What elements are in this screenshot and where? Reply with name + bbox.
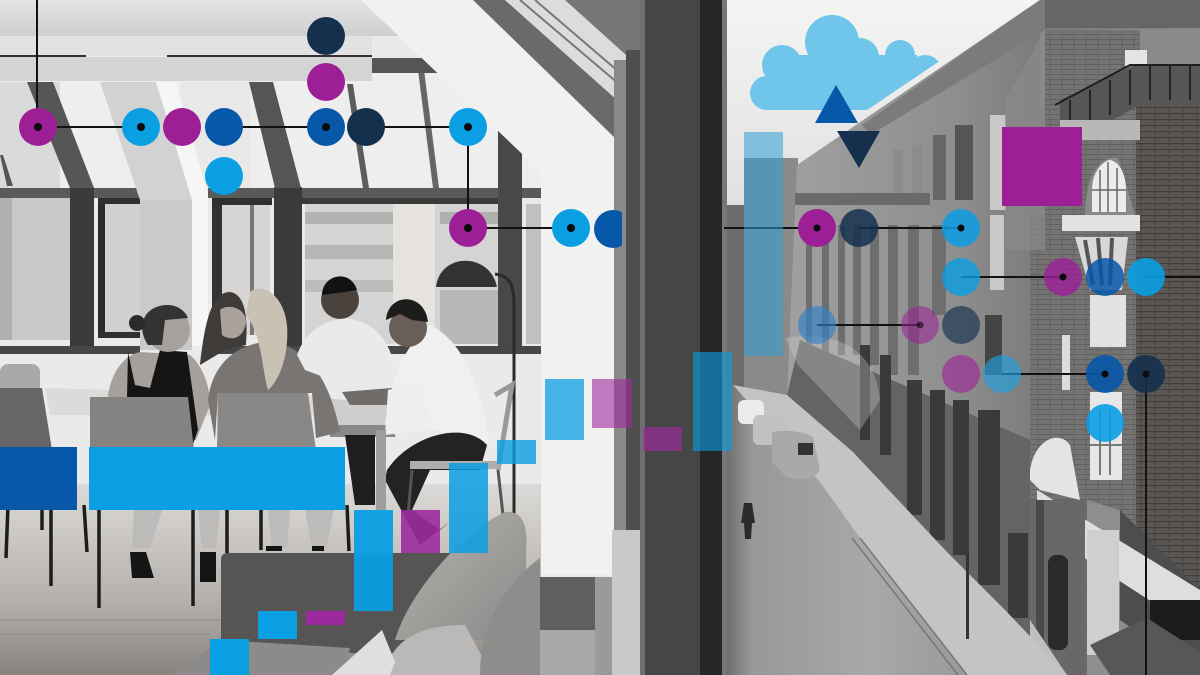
pedestrian xyxy=(741,503,755,539)
dark band xyxy=(795,193,930,205)
long facade xyxy=(787,0,1067,675)
photo: office interior xyxy=(0,0,640,675)
far chair xyxy=(0,364,40,394)
door pilasters xyxy=(1030,500,1085,675)
photo: street view xyxy=(722,0,1200,675)
legs of people xyxy=(132,510,334,548)
arched window xyxy=(1085,158,1135,215)
sloped wall xyxy=(361,0,614,575)
lamp xyxy=(436,261,497,287)
person 4 xyxy=(297,318,398,385)
chair legs xyxy=(6,505,349,608)
skylight side frames xyxy=(473,0,626,140)
overlay: dots right xyxy=(798,209,1165,442)
icon: cloud xyxy=(750,15,942,110)
roof balcony xyxy=(1055,50,1200,140)
lamp post xyxy=(966,555,969,639)
table xyxy=(45,388,330,416)
brick tower xyxy=(1136,105,1200,675)
windows xyxy=(806,125,973,375)
icon: triangle up xyxy=(815,85,858,123)
overlay: dots left xyxy=(19,17,632,248)
rafters xyxy=(27,82,94,188)
sofa xyxy=(221,553,461,653)
icon: triangle down xyxy=(837,131,880,168)
awning xyxy=(1090,618,1200,675)
window frames xyxy=(0,188,140,198)
ceiling xyxy=(0,0,400,36)
overlay: coloured bars xyxy=(0,352,732,675)
distant buildings xyxy=(744,158,798,398)
glass reflections xyxy=(785,336,880,430)
windows xyxy=(0,198,70,340)
ceiling beam xyxy=(0,57,372,81)
overlay: tall blue bar on street xyxy=(744,132,783,356)
cabinet and corner xyxy=(540,577,595,630)
overlay: purple square xyxy=(1002,127,1082,206)
lower wall xyxy=(0,354,541,484)
people xyxy=(108,276,490,545)
chairs xyxy=(0,388,52,450)
table leg xyxy=(376,430,386,510)
sidewalk xyxy=(733,385,1067,675)
person 5 xyxy=(385,325,490,445)
person 3 xyxy=(208,342,340,440)
road xyxy=(727,378,967,675)
person 1 xyxy=(108,352,210,440)
person 2 xyxy=(200,292,247,365)
cars xyxy=(738,400,820,479)
brick facade xyxy=(1030,30,1140,675)
skylight glass xyxy=(0,72,541,190)
overlay: node centre points xyxy=(34,123,1150,378)
floor xyxy=(0,484,541,675)
ground floor xyxy=(787,340,1067,675)
beam pillar xyxy=(100,82,192,200)
cornice and shopfront xyxy=(1087,500,1200,675)
decorative lintel xyxy=(1062,215,1140,231)
photo: window column xyxy=(640,0,722,675)
